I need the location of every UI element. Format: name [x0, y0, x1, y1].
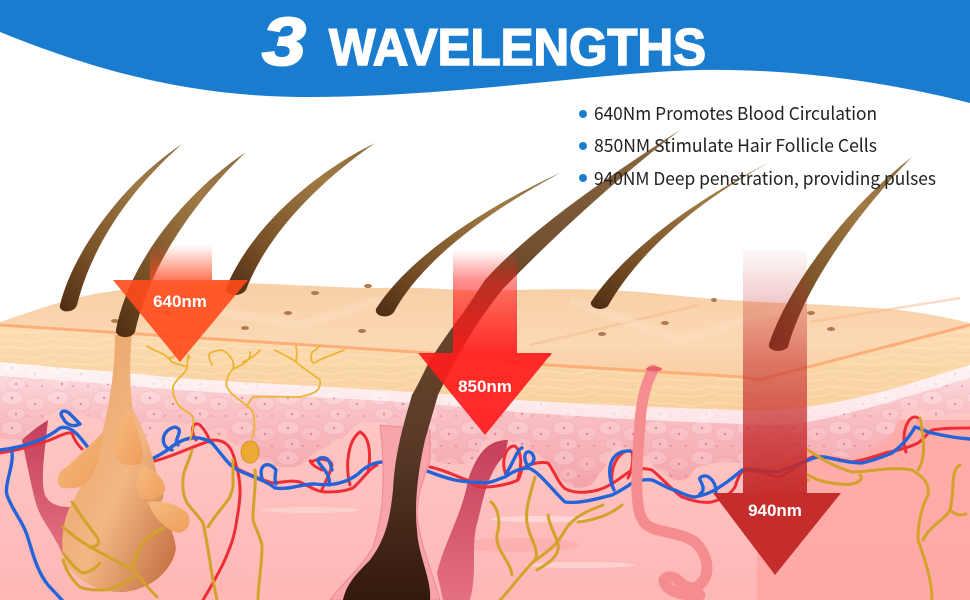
- title: [262, 4, 706, 80]
- blue vessels: [0, 411, 970, 600]
- banner: [0, 0, 970, 103]
- arrow: 940nm: 940nm: [748, 501, 802, 520]
- title: 3: [262, 4, 306, 80]
- benefit list: [579, 100, 936, 191]
- sweat duct: [637, 366, 707, 595]
- blood vessels: [0, 411, 970, 600]
- arrow: 850nm: [418, 250, 552, 435]
- upper nerves: [147, 345, 344, 440]
- skin surface: [0, 283, 970, 380]
- lower nerves: [63, 418, 966, 600]
- arrow: 940nm: [713, 250, 841, 575]
- nerves: [63, 345, 966, 600]
- fat layer: [0, 325, 970, 410]
- red vessels: [0, 417, 970, 600]
- benefit list: 850NM Stimulate Hair Follicle Cells: [594, 132, 877, 158]
- arrow: 640nm: 640nm: [153, 292, 207, 311]
- benefit list: 640Nm Promotes Blood Circulation: [594, 100, 877, 126]
- oil gland with hair follicle: [58, 335, 190, 592]
- arrow: 850nm: 850nm: [458, 377, 512, 396]
- benefit list: 940NM Deep penetration, providing pulses: [594, 165, 936, 191]
- follicle sheath: [330, 425, 440, 600]
- dermis layer: [0, 400, 970, 600]
- hairs: [60, 143, 912, 351]
- skin cell layer: [0, 362, 970, 488]
- arrector muscles: [22, 420, 508, 600]
- title: WAVELENGTHS: [329, 19, 706, 77]
- nerve ganglion: [241, 441, 259, 463]
- arrow: 640nm: [113, 245, 248, 362]
- dark hair follicle: [343, 130, 680, 600]
